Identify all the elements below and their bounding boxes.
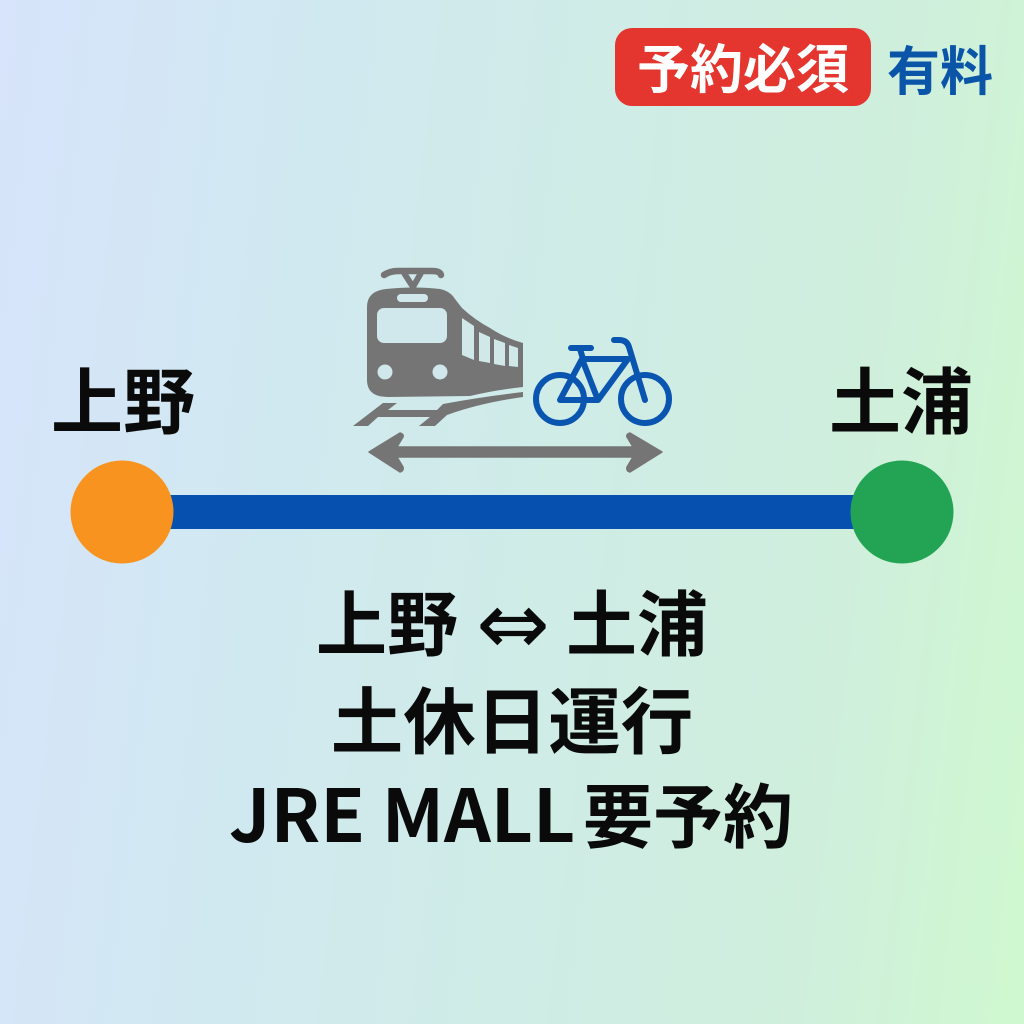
text block: route and service details: 要予約 [583,762,793,863]
station marker: Ueno [70,460,174,564]
text block: route and service details: ⇔ [476,572,550,675]
text block: route and service details [229,569,793,864]
icon: train [367,271,523,397]
label: paid: 有料 [887,30,993,106]
arrow: two-way [369,433,662,472]
icon: bicycle [536,340,669,423]
station label: Ueno: 上野 [51,344,195,449]
station marker: Tsuchiura [850,460,954,564]
route line [165,495,860,529]
text block: route and service details: 上野 [316,569,458,671]
icon: railway track [353,392,523,426]
badge: reservation required: 予約必須 [637,28,849,104]
text block: route and service details: JRE MALL [229,758,575,864]
text block: route and service details: 土休日運行 [331,664,693,769]
station label: Tsuchiura: 土浦 [829,344,973,449]
text block: route and service details: 土浦 [566,569,708,671]
